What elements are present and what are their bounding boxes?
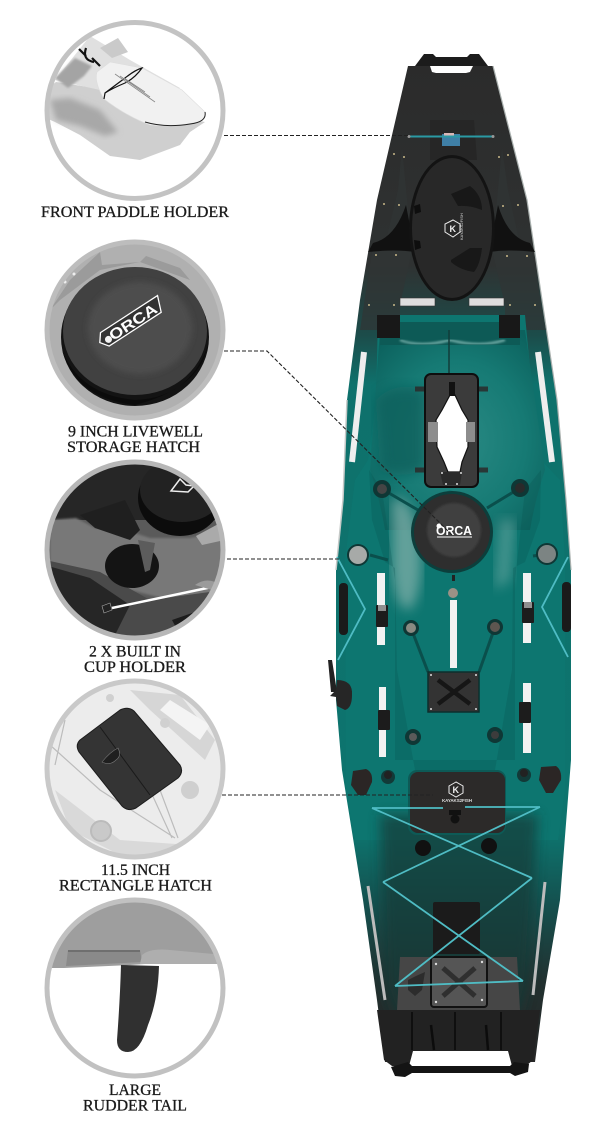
bow deck shading — [430, 120, 477, 160]
orca logo on hatch: ORCA — [436, 523, 473, 538]
paddle blade — [96, 62, 205, 126]
label: rectangle hatch: RECTANGLE HATCH — [59, 878, 212, 895]
stern grey platform — [397, 957, 520, 1010]
hex moulding — [408, 972, 425, 996]
deck mottling — [392, 498, 421, 610]
label: livewell hatch: 9 INCH LIVEWELL — [68, 424, 203, 440]
side bungees — [337, 557, 568, 660]
circle: front paddle holder — [46, 22, 223, 198]
label: livewell hatch: STORAGE HATCH — [67, 439, 200, 456]
label: rudder tail: RUDDER TAIL — [83, 1098, 187, 1115]
callout line: cup holder — [227, 558, 340, 560]
stern black block — [377, 1010, 540, 1066]
circle: livewell storage hatch — [47, 242, 223, 418]
bow black squares — [377, 315, 400, 338]
stern handle cutout — [409, 1051, 512, 1066]
stern tank panel — [433, 902, 480, 954]
bow shoulders — [360, 148, 412, 330]
hull body — [336, 66, 571, 1062]
hatch lid — [77, 708, 182, 810]
callout line: livewell hatch — [224, 351, 452, 535]
side white rails — [352, 352, 364, 462]
deck dots — [368, 153, 536, 306]
deck rails and clamps — [376, 573, 534, 757]
oval wings — [368, 205, 415, 252]
label: rudder tail: LARGE — [109, 1082, 161, 1099]
label: front paddle holder: FRONT PADDLE HOLDER — [41, 204, 229, 221]
bow oval hatch — [409, 155, 495, 301]
stern side rails — [368, 886, 385, 1000]
label: rudder tail — [83, 1082, 187, 1115]
stern handle — [391, 1062, 529, 1077]
stern rectangle hatch: K — [452, 785, 460, 795]
hatch logo — [445, 220, 460, 237]
rudder fin — [117, 965, 159, 1052]
circle: rectangle hatch — [47, 681, 223, 860]
orca logo: ORCA — [106, 301, 161, 344]
circle: cup holder — [45, 458, 225, 645]
stern gaskets and knobs — [351, 766, 561, 856]
circle: rudder tail — [45, 898, 225, 1076]
X pad — [428, 672, 479, 712]
stern X pad — [431, 957, 487, 1007]
bow handle cutout — [430, 66, 473, 73]
deck bungee cords — [372, 807, 540, 986]
orca centre hatch — [411, 491, 493, 573]
label: rectangle hatch — [59, 862, 212, 895]
orca logo — [99, 294, 162, 347]
label: cup holder: 2 X BUILT IN — [89, 644, 181, 660]
label: cup holder — [84, 644, 186, 676]
label: livewell hatch — [67, 424, 203, 456]
callout line: front paddle holder — [224, 134, 408, 136]
side carry handles — [339, 583, 348, 635]
kayak — [328, 54, 571, 1077]
seat mount — [415, 374, 488, 487]
hull pale edges — [493, 66, 571, 570]
bow handle — [415, 54, 488, 72]
cockpit deck — [345, 315, 565, 840]
label: rectangle hatch: 11.5 INCH — [101, 862, 170, 879]
bow white bars — [400, 298, 435, 306]
callout line: rectangle hatch — [222, 794, 433, 796]
stern rectangle hatch — [408, 770, 506, 835]
centre keel line — [448, 330, 450, 376]
small hatch in cup view — [138, 486, 215, 536]
bow oval hatch: K — [450, 224, 456, 234]
stern well — [380, 815, 538, 1015]
label: cup holder: CUP HOLDER — [84, 659, 186, 676]
rudder lever — [328, 660, 352, 710]
stern rectangle hatch: KAYAKS2FISH — [442, 798, 472, 803]
paddle holder rod and tag — [408, 133, 494, 146]
scuppers — [347, 479, 558, 745]
spokes from hatch — [370, 488, 547, 672]
bow oval hatch: KAYAKS2FISH — [459, 213, 464, 240]
